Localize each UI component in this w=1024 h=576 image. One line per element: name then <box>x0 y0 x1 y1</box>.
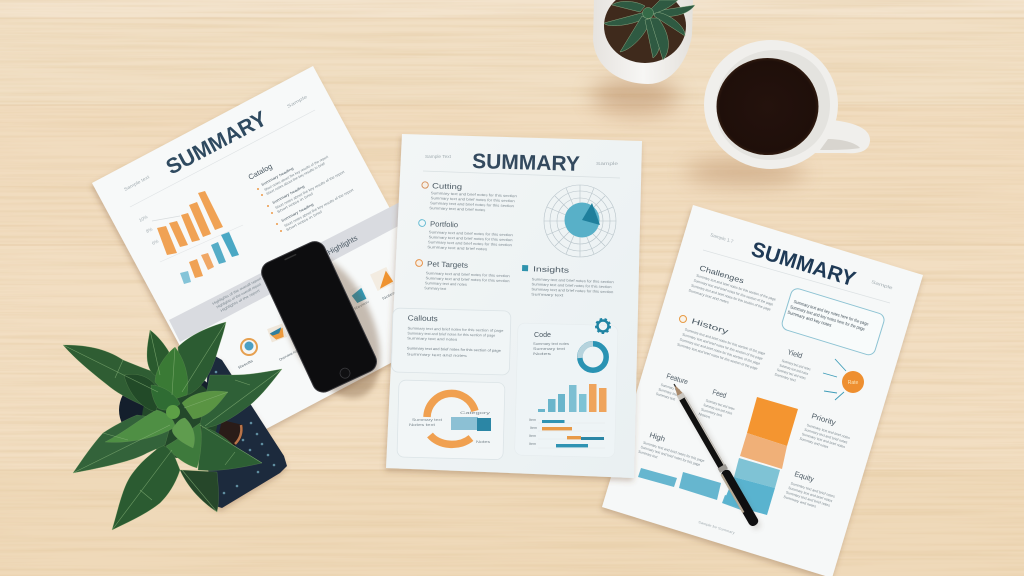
section: feature: Summary text <box>660 383 681 393</box>
section: equity: Summary text and brief notes <box>785 490 831 508</box>
section: feed: Notes <box>698 412 711 419</box>
section: history with orange icon: Summary text and brief notes for this section of the page <box>684 328 766 356</box>
card: callouts: Summary text and brief notes for this section of page <box>407 331 495 338</box>
leaf: inner bright <box>105 410 175 442</box>
leaf: bottom small <box>180 470 219 512</box>
section: feed <box>698 385 739 426</box>
horizontal timeline chart <box>529 418 605 448</box>
section: high: Summary text and brief notes for this page <box>643 441 705 463</box>
section: insights: Summary text and brief notes for this section <box>531 287 613 294</box>
center bud <box>166 405 180 419</box>
section: feature: Feature <box>665 371 689 386</box>
section: priority: Summary text and brief notes <box>804 428 848 445</box>
pot and cup cast shadows <box>591 78 805 184</box>
left sheet header notes: Sample <box>286 94 309 109</box>
grey highlight band: Highlights <box>326 233 359 257</box>
section: cutting: Cutting <box>432 181 462 191</box>
section: challenges: Summary text and notes <box>688 288 730 305</box>
plant pot <box>119 370 243 450</box>
left sheet title: SUMMARY <box>162 106 271 179</box>
section: challenges: Challenges <box>698 263 745 285</box>
orange bar chart: 6% <box>151 238 159 246</box>
horizontal timeline chart: Item <box>529 434 536 438</box>
section: feed: Feed <box>711 387 727 400</box>
cup body <box>704 40 838 169</box>
center sheet header notes: Sample Text <box>425 154 452 159</box>
grey highlight band: Highlights of the overall report <box>216 282 262 309</box>
donut chart <box>580 344 606 370</box>
section: insights: Insights <box>533 264 570 275</box>
section: feed: Summary text and notes <box>705 399 735 411</box>
section: yield: Summary text and notes <box>779 363 809 376</box>
section: high <box>638 429 708 473</box>
plant core <box>142 378 218 458</box>
grey highlight band: Highlights of the overall report <box>212 277 262 306</box>
leaf: center up <box>155 347 188 400</box>
section: cutting: Summary text and brief notes for this section <box>430 201 514 208</box>
left sheet catalog notes: Catalog <box>247 162 274 182</box>
leaf: lower center <box>166 423 201 468</box>
section: insights: Summary text and brief notes for this section <box>532 277 614 284</box>
section: insights <box>521 264 614 299</box>
succulent leaves <box>604 0 695 60</box>
card: ring chart: Notes text <box>409 423 435 427</box>
teal bars <box>638 468 745 510</box>
row of small icons: Review <box>354 300 370 311</box>
leaf: small top <box>147 330 169 378</box>
left sheet catalog notes: Short notes about the key results of the report <box>274 170 345 210</box>
left sheet catalog notes: Short notes about the key results of the report <box>283 188 354 228</box>
code heading and notes: Code <box>534 330 551 339</box>
card: callouts: Summary text and brief notes for this section of page <box>407 346 501 353</box>
leaf: center right bright <box>182 391 228 419</box>
radar chart <box>544 185 616 257</box>
section: cutting <box>421 181 517 213</box>
panel: left summary sheet <box>92 66 455 446</box>
leaf: center down <box>172 418 195 448</box>
soil <box>604 0 686 63</box>
calculator <box>205 352 287 508</box>
center sheet header notes <box>423 154 620 178</box>
section: feed: Summary text <box>700 408 723 418</box>
section: priority: Summary text and brief notes <box>806 423 851 440</box>
section: cutting: Summary text and brief notes for this section <box>431 196 515 203</box>
vertical bar chart <box>538 384 606 412</box>
section: targets: Summary text and brief notes for this section <box>426 276 510 283</box>
code heading and notes: Summary text notes <box>533 342 569 346</box>
left sheet catalog notes <box>247 150 356 232</box>
right sheet header notes <box>703 232 894 303</box>
code heading and notes: Notes <box>533 352 551 356</box>
horizontal timeline chart: Item <box>530 426 537 430</box>
section: feature: Summary text <box>658 387 678 397</box>
horizontal timeline chart: Item <box>529 442 536 446</box>
callout box: Summary and key notes <box>787 310 833 328</box>
section: feature <box>655 370 689 404</box>
orange bar chart: 10% <box>138 214 148 223</box>
right sheet title: SUMMARY <box>749 238 858 291</box>
section: portfolio: Portfolio <box>430 219 458 229</box>
card: callouts: Summary text and notes <box>407 336 458 342</box>
section: priority <box>799 410 854 455</box>
row of small icons: Overview notes <box>279 347 302 362</box>
section: portfolio: Summary text and brief notes for this section <box>429 230 513 237</box>
right sheet header notes: Sample 1.7 <box>710 232 735 244</box>
section: yield: Yield <box>786 347 803 360</box>
section: feed: Summary text and notes <box>703 403 733 416</box>
section: history with orange icon: Summary text and brief notes for this section of the page <box>677 342 758 371</box>
large green plant <box>63 322 282 530</box>
section: portfolio: Summary text and brief notes <box>427 245 488 251</box>
section: targets: Pet Targets <box>427 259 468 270</box>
section: priority: Priority <box>810 411 837 427</box>
section: high: Summary text <box>638 450 658 459</box>
section: equity: Summary text and brief notes <box>788 486 833 503</box>
card: callouts <box>391 308 511 375</box>
card: ring chart: Notes <box>476 440 490 444</box>
left sheet catalog notes: Short notes about the key results in brief <box>266 162 326 196</box>
leaf: top right <box>178 322 226 395</box>
grey highlight band: Highlights of the report <box>220 289 261 313</box>
leaf: lower right <box>198 427 262 471</box>
center sheet header notes: Sample <box>596 161 619 166</box>
section: feature: Summary text <box>655 392 676 402</box>
card: ring chart: Summary text <box>412 418 442 422</box>
section: challenges: Summary text and brief notes for this section of the page <box>696 274 776 302</box>
left sheet catalog notes: Short notes in brief <box>286 210 323 232</box>
panel: center summary sheet <box>386 134 642 478</box>
leaf: left lower <box>73 415 172 473</box>
section: targets: Summary text and brief notes for this section <box>426 271 510 278</box>
left sheet header notes: Sample text <box>123 174 151 192</box>
section: high: High <box>648 430 666 444</box>
section: cutting: Summary text and brief notes <box>429 206 486 212</box>
leaf: bottom long <box>112 445 180 530</box>
left sheet catalog notes: Short notes in brief <box>277 192 314 214</box>
card: code charts <box>515 319 618 458</box>
section: high: Summary text and brief notes for this page <box>640 445 701 467</box>
section: cutting: Summary text and brief notes for this section <box>431 191 517 198</box>
section: portfolio <box>418 219 513 252</box>
section: yield <box>774 346 815 386</box>
section: insights: Summary text <box>531 292 563 297</box>
code heading and notes <box>533 330 569 356</box>
section: targets: Summary text and notes <box>425 281 467 287</box>
section: insights: Summary text and brief notes for this section <box>531 282 612 289</box>
right sheet header notes: Sample <box>871 279 894 291</box>
callout box: Summary text and key notes here for the page <box>789 304 866 332</box>
callout box: Summary text and key notes here for the page <box>793 299 870 327</box>
leaf: far left <box>63 345 160 410</box>
card: callouts: Summary text and notes <box>407 352 467 358</box>
grey highlight band <box>169 201 406 342</box>
left sheet header notes <box>123 94 315 207</box>
left sheet catalog notes: Short notes about the key results of the report <box>263 155 329 192</box>
section: history with orange icon: History <box>690 316 730 336</box>
section: portfolio: Summary text and brief notes for this section <box>428 240 512 247</box>
leaf: right long <box>200 369 282 428</box>
leaf midribs <box>63 322 282 530</box>
orange bar chart: 8% <box>145 226 153 234</box>
section: equity: Summary and notes <box>783 495 817 509</box>
section: equity: Summary text and brief notes <box>790 481 835 499</box>
section: challenges: Summary text and brief notes for this section of the page <box>691 283 771 312</box>
row of small icons: Notes <box>382 291 396 301</box>
section: yield: Summary text <box>774 372 796 383</box>
section: priority: Summary text and brief notes <box>801 432 846 449</box>
left sheet catalog notes: Summary heading <box>281 202 314 223</box>
section: challenges: Summary text and brief notes for this section of the page <box>693 279 774 307</box>
section: targets: Summary text <box>424 286 446 291</box>
card: ring chart <box>397 380 505 460</box>
code heading and notes: Summary text <box>533 347 565 351</box>
section: targets <box>415 259 510 293</box>
leaf: center left inner dark <box>124 374 160 412</box>
section: history with orange icon: Summary text and brief notes for this section of the page <box>682 333 763 361</box>
cup handle <box>815 120 870 153</box>
section: challenges <box>688 262 779 317</box>
card: ring chart: Category <box>460 411 490 415</box>
coffee cup <box>704 40 870 169</box>
section: equity: Equity <box>793 469 815 484</box>
left sheet catalog notes: Summary heading <box>272 184 305 205</box>
section: yield: Summary text and notes <box>776 368 806 380</box>
small potted succulent <box>593 0 695 84</box>
card: callouts: Summary text and brief notes for this section of page <box>407 326 503 333</box>
row of small icons: Results <box>238 359 254 370</box>
orange hub diagram: Rate <box>848 380 858 386</box>
pen <box>669 382 760 528</box>
icon: gear <box>596 319 610 333</box>
callout box <box>780 287 886 356</box>
coffee <box>716 58 818 155</box>
section: equity <box>783 468 839 513</box>
panel: right summary sheet <box>602 205 923 576</box>
section: history with orange icon <box>677 314 770 372</box>
right sheet footer: Sample for Summary <box>698 520 735 535</box>
section: priority: Summary and notes <box>799 437 829 449</box>
orange hub diagram <box>823 359 864 400</box>
center sheet title: SUMMARY <box>472 150 580 176</box>
left sheet catalog notes: Summary heading <box>261 166 294 187</box>
section: yield: Summary text and notes <box>781 359 811 372</box>
row of small icons <box>238 267 396 370</box>
section: history with orange icon: Summary text and brief notes for this section of the page <box>679 338 761 366</box>
lower teal and orange bar chart <box>160 225 243 284</box>
stacked orange and teal bar <box>723 397 798 515</box>
card: callouts: Callouts <box>408 313 438 323</box>
orange bar chart <box>138 191 223 255</box>
section: portfolio: Summary text and brief notes for this section <box>429 235 513 242</box>
horizontal timeline chart: Item <box>529 418 536 422</box>
leaf: center left <box>151 385 180 410</box>
phone <box>258 237 401 413</box>
